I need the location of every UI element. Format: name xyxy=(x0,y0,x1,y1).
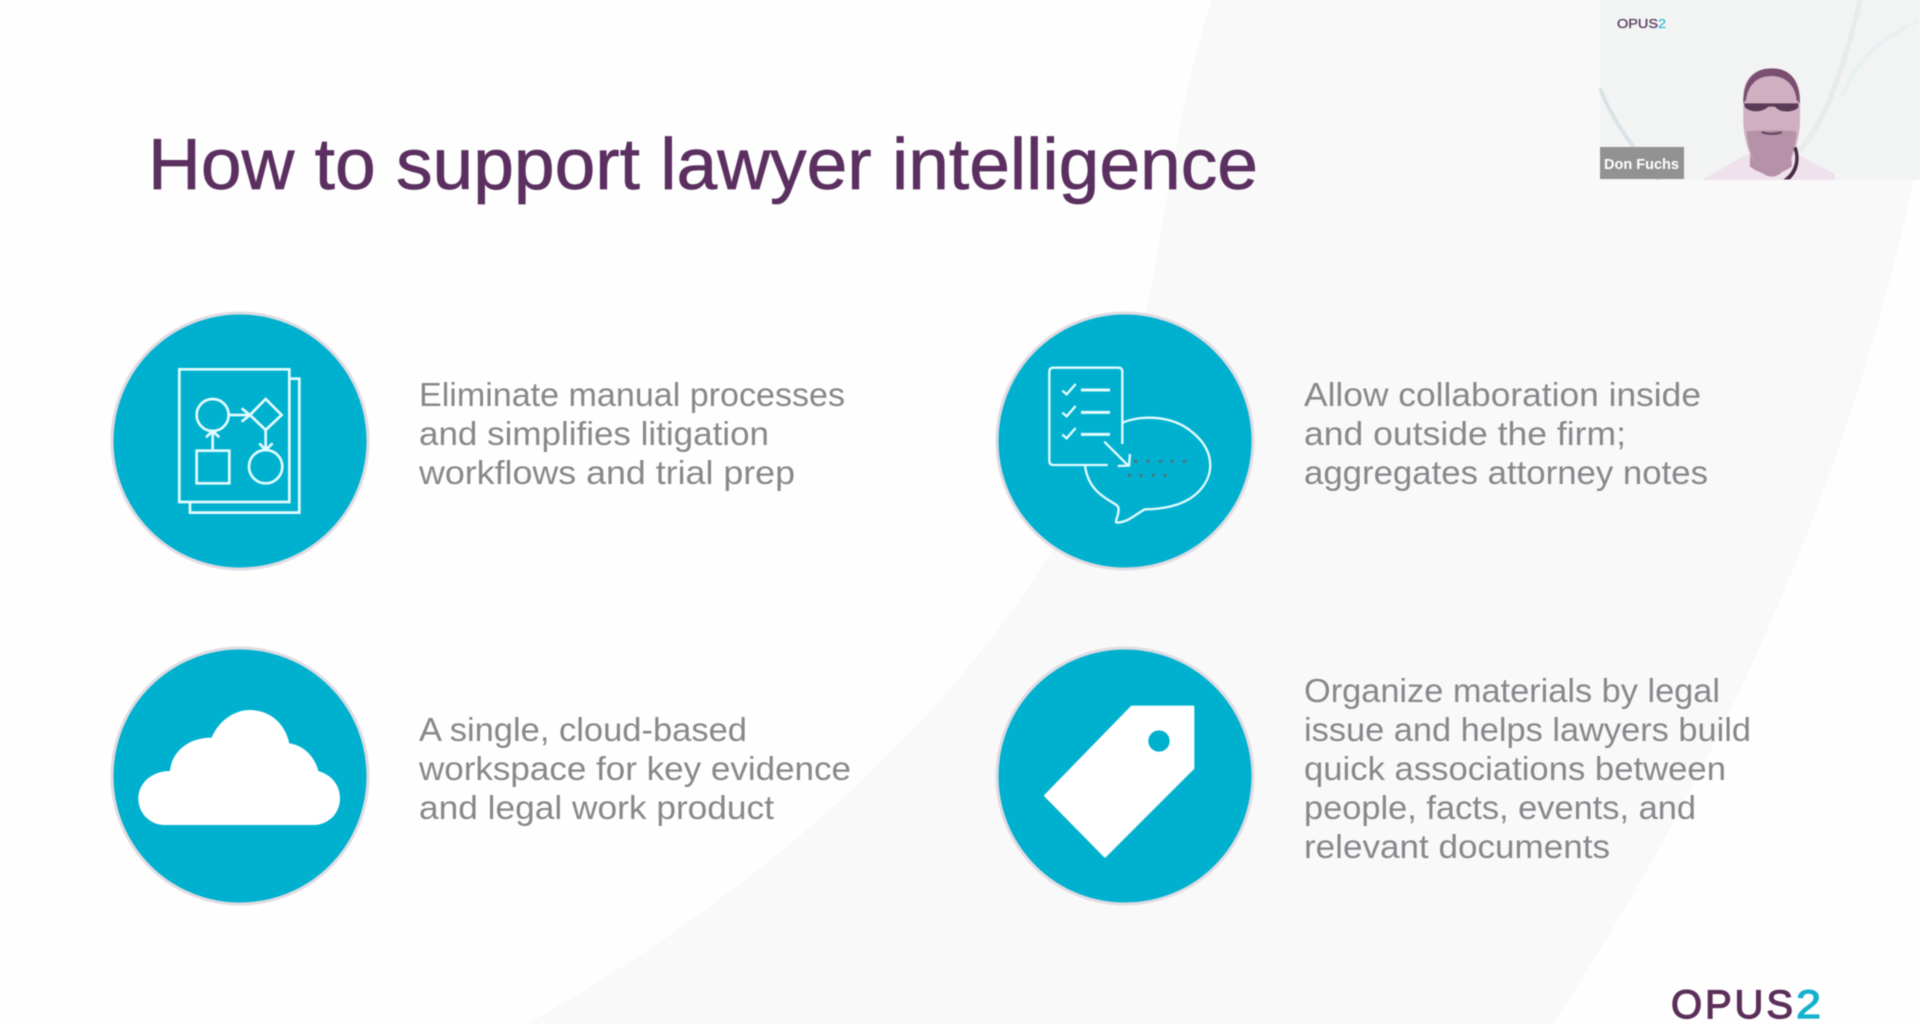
speaker video panel xyxy=(1600,0,1920,180)
text: allow collaboration: aggregates attorney notes xyxy=(1304,454,1708,491)
text: allow collaboration: Allow collaboration inside xyxy=(1304,376,1701,413)
item: allow collaboration xyxy=(997,313,1708,569)
text: organize materials: people, facts, events, and xyxy=(1304,789,1696,826)
text: cloud-based workspace: workspace for key evidence xyxy=(418,750,851,787)
title: How to support lawyer intelligence xyxy=(148,125,1258,205)
icon: tag xyxy=(997,648,1253,904)
icon: cloud xyxy=(112,648,368,904)
text: eliminate manual processes xyxy=(418,376,845,491)
text: cloud-based workspace xyxy=(418,711,851,826)
text: cloud-based workspace: A single, cloud-based xyxy=(419,711,747,748)
name label: Don Fuchs xyxy=(1604,156,1679,173)
name label xyxy=(1600,147,1684,179)
item: organize materials xyxy=(997,648,1751,904)
text: eliminate manual processes: and simplifies litigation xyxy=(419,415,769,452)
item: eliminate manual processes xyxy=(112,313,845,569)
item: cloud-based workspace xyxy=(112,648,851,904)
text: organize materials: relevant documents xyxy=(1304,828,1610,865)
text: organize materials: issue and helps lawyers build xyxy=(1304,711,1751,748)
text: allow collaboration: and outside the firm; xyxy=(1304,415,1626,452)
text: organize materials: Organize materials by legal xyxy=(1304,672,1720,709)
text: eliminate manual processes: Eliminate manual processes xyxy=(419,376,845,413)
text: eliminate manual processes: workflows and trial prep xyxy=(418,454,795,491)
text: cloud-based workspace: and legal work product xyxy=(419,789,774,826)
text: organize materials xyxy=(1304,672,1751,865)
text: allow collaboration xyxy=(1304,376,1708,491)
background swoosh xyxy=(527,0,1920,1024)
text: organize materials: quick associations between xyxy=(1304,750,1726,787)
small opus2 logo: OPUS 2 xyxy=(1617,16,1666,31)
person xyxy=(1703,68,1835,180)
icon: workflow document xyxy=(112,313,368,569)
icon: checklist and speech bubble xyxy=(997,313,1253,569)
